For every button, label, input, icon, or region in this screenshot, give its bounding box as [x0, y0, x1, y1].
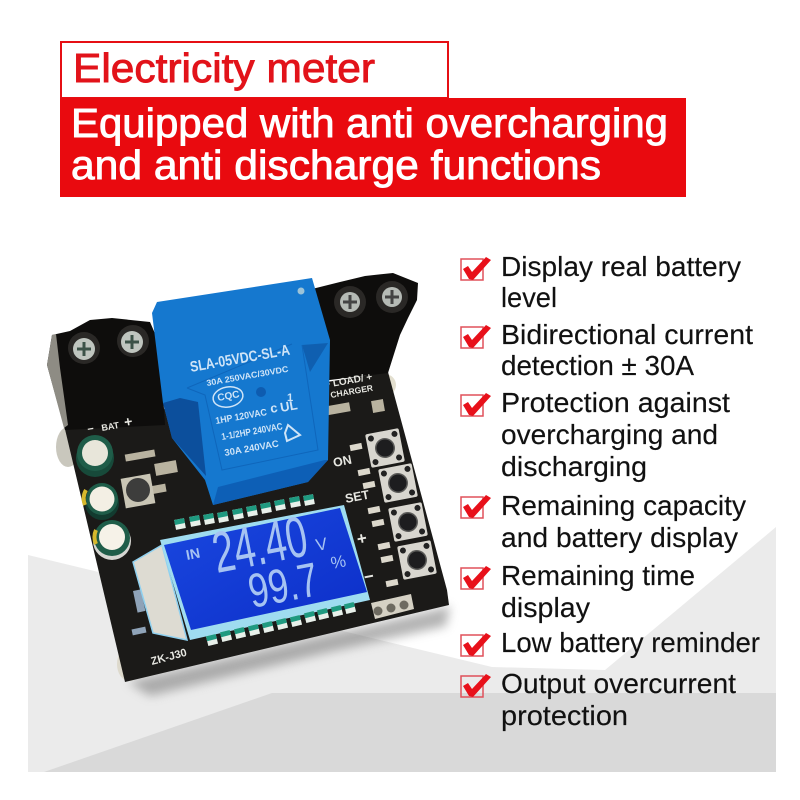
feature: real battery level: level: [501, 282, 557, 313]
mounting standoffs: [56, 374, 446, 681]
feature: overcurrent protection: protection: [501, 700, 628, 731]
feature: real battery level: Display real battery: [501, 251, 741, 282]
feature: bidirectional current: Bidirectional current: [501, 319, 753, 350]
feature: bidirectional current: [461, 319, 753, 381]
relay label text: [189, 342, 300, 459]
LCD readings: 99.7: [244, 553, 323, 619]
relay: [152, 278, 330, 505]
silkscreen labels: +: [355, 528, 369, 549]
relay label text: CQC: [217, 389, 240, 404]
silkscreen labels: ON: [332, 453, 353, 470]
silkscreen labels: [86, 372, 376, 668]
small board components: [125, 399, 385, 635]
feature: remaining time: display: [501, 592, 590, 623]
button side pads: [350, 443, 398, 587]
feature: remaining capacity: [461, 490, 746, 553]
tact buttons: [365, 428, 437, 580]
relay label text: 1-1/2HP 240VAC: [221, 421, 284, 443]
title box: Electricity meter: [61, 42, 448, 98]
LCD readings: IN: [185, 545, 201, 563]
three-pin connector: [371, 594, 414, 619]
relay label text: UL: [279, 397, 299, 415]
product photo: battery meter board: [47, 273, 450, 696]
left terminal block: [47, 318, 165, 430]
red banner heading: [60, 98, 686, 197]
feature: remaining capacity: and battery display: [501, 522, 738, 553]
silkscreen labels: +: [123, 413, 134, 430]
feature: protection: discharging: [501, 451, 647, 482]
feature: protection: [461, 387, 730, 482]
board shadow: [128, 606, 450, 696]
feature: remaining time: [461, 560, 695, 623]
silkscreen labels: ZK-J30: [150, 647, 188, 668]
silkscreen labels: SET: [344, 487, 371, 506]
relay label text: 1HP 120VAC: [215, 407, 268, 427]
inductor: [121, 474, 155, 508]
feature: remaining capacity: Remaining capacity: [501, 490, 746, 521]
feature: low battery reminder: Low battery reminder: [501, 627, 760, 658]
LCD teal pads bottom: [206, 602, 356, 646]
circuit board: [64, 372, 449, 682]
feature: overcurrent protection: [461, 668, 736, 731]
relay label text: SLA-05VDC-SL-A: [189, 342, 291, 376]
silkscreen labels: −: [86, 423, 95, 436]
silkscreen labels: CHARGER: [330, 383, 374, 400]
background geometric panel: [28, 500, 776, 772]
LCD readings: %: [329, 551, 348, 573]
feature: protection: overcharging and: [501, 419, 718, 450]
relay label text: c: [269, 400, 279, 416]
LCD teal pads top: [174, 494, 315, 530]
feature: overcurrent protection: Output overcurrent: [501, 668, 736, 699]
red banner heading: and anti discharge functions: [71, 142, 601, 188]
feature list: [461, 251, 760, 731]
LCD screen: [160, 504, 370, 640]
feature: protection: Protection against: [501, 387, 730, 418]
silkscreen labels: − LOAD/ +: [324, 372, 373, 391]
LCD readings: [185, 504, 348, 619]
LCD white light guide: [133, 545, 187, 640]
right terminal block: [300, 273, 418, 382]
silkscreen labels: −: [362, 566, 376, 587]
relay label text: 30A 240VAC: [224, 439, 280, 459]
relay label text: 1: [287, 392, 293, 404]
feature: real battery level: [461, 251, 741, 313]
red banner heading: Equipped with anti overcharging: [71, 100, 668, 146]
feature: remaining time: Remaining time: [501, 560, 695, 591]
feature: bidirectional current: detection ± 30A: [501, 350, 694, 381]
title box: Electricity meter: Electricity meter: [73, 45, 375, 91]
silkscreen labels: BAT: [101, 420, 120, 433]
relay label text: 30A 250VAC/30VDC: [206, 364, 289, 388]
LCD readings: 24.40: [207, 504, 313, 586]
capacitors: [76, 435, 131, 560]
LCD readings: V: [314, 534, 330, 555]
